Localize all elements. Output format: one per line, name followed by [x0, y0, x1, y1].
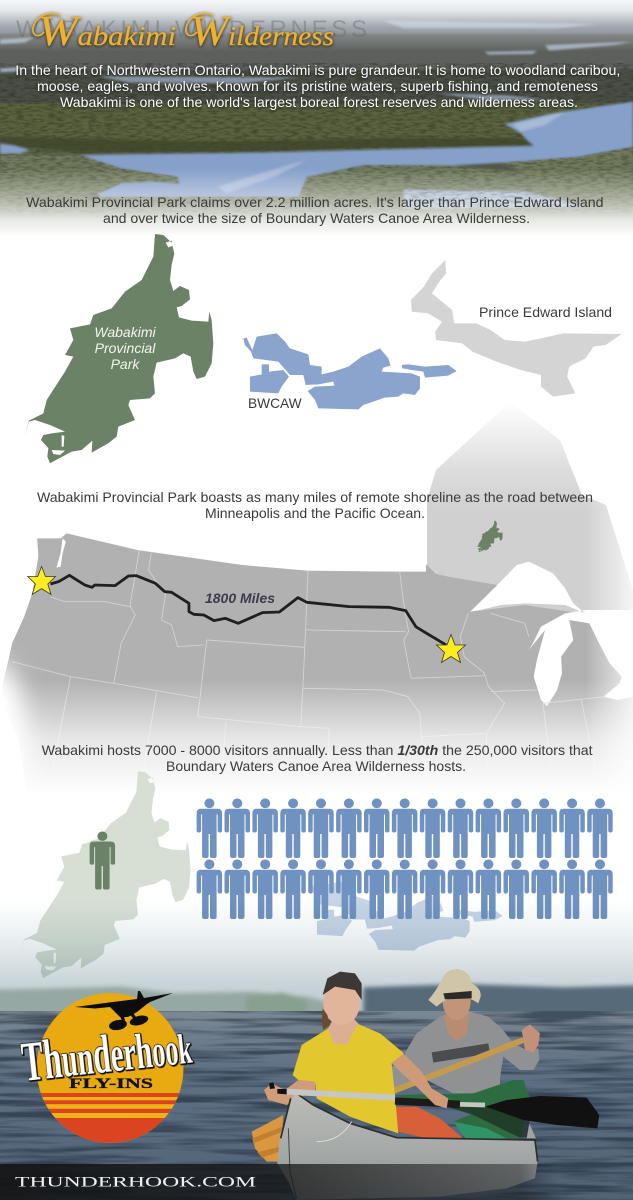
far paddle shaft	[390, 1040, 523, 1092]
logo: Thunderhook Fly-Ins	[19, 991, 195, 1148]
map: Prince Edward Island	[411, 260, 622, 397]
woman in yellow shirt	[264, 972, 404, 1133]
title	[33, 9, 334, 55]
near paddle	[269, 1082, 599, 1128]
faded Wabakimi outline	[20, 771, 191, 978]
label: BWCAW: BWCAW	[248, 395, 302, 411]
near paddle wood blade	[252, 1115, 283, 1162]
man in grey shirt	[387, 969, 540, 1093]
label: Wabakimi Provincial Park	[94, 324, 156, 372]
title: Wabakimi	[38, 9, 176, 55]
panel: canoe photo footer	[0, 900, 633, 1200]
shoreline comparison text	[37, 489, 593, 521]
shoreline comparison text: Wabakimi Provincial Park boasts as many miles of remote shoreline as the road between	[37, 489, 593, 505]
size comparison text: Wabakimi Provincial Park claims over 2.2 million acres. It's larger than Prince Edward Island	[26, 194, 604, 210]
intro paragraph: moose, eagles, and wolves. Known for its pristine waters, superb fishing, and remoteness	[37, 78, 598, 94]
distant treeline	[0, 984, 633, 1020]
label: Wabakimi Provincial Park: Provincial	[95, 340, 156, 356]
water ripples	[0, 1011, 633, 1200]
size comparison text: and over twice the size of Boundary Waters Canoe Area Wilderness.	[103, 210, 530, 226]
ghost heading: WABAKIMI WILDERNESS	[16, 16, 367, 43]
green and orange gear	[393, 1080, 530, 1140]
canoe hull	[277, 1092, 538, 1200]
visitor comparison text	[42, 742, 593, 774]
footer bar	[0, 1164, 633, 1200]
faded BWCAW outline	[311, 882, 503, 951]
icon: star Minneapolis	[436, 634, 466, 662]
panel: visitor comparison	[20, 742, 613, 978]
shoreline comparison text: Minneapolis and the Pacific Ocean.	[205, 505, 425, 521]
great lakes	[57, 538, 633, 706]
woman's forearm	[392, 1053, 448, 1108]
icon: Wabakimi location in Ontario	[476, 521, 503, 552]
map: Boundary Waters	[243, 333, 457, 409]
logo wordmark: Thunderhook	[19, 1014, 195, 1094]
size comparison text	[26, 194, 604, 226]
icon: star Pacific Ocean	[28, 566, 56, 594]
map: northern United States	[2, 533, 633, 800]
panel: aerial lake photo header	[0, 0, 633, 252]
intro paragraph: In the heart of Northwestern Ontario, Wabakimi is pure grandeur. It is home to woodland caribou,	[15, 62, 620, 78]
visitor comparison text: Wabakimi hosts 7000 - 8000 visitors annually. Less than 1/30th the 250,000 visitors that	[42, 742, 593, 758]
label: Wabakimi Provincial Park: Park	[111, 356, 140, 372]
intro paragraph: Wabakimi is one of the world's largest boreal forest reserves and wilderness areas.	[60, 94, 578, 110]
title: Wilderness	[190, 9, 334, 55]
route line	[50, 575, 446, 645]
panel: shoreline route map	[0, 402, 633, 830]
logo subtitle: FLY-INS	[69, 1076, 153, 1092]
state borders	[12, 550, 606, 770]
lake water	[0, 1011, 633, 1200]
icon: floatplane	[75, 991, 173, 1031]
footer website text: THUNDERHOOK.COM	[15, 1174, 256, 1190]
icon: single green visitor	[90, 832, 115, 890]
photo: forest and lakes	[0, 0, 633, 240]
label: Wabakimi Provincial Park: Wabakimi	[94, 324, 156, 340]
panel: size comparison maps	[24, 234, 622, 463]
map: Wabakimi park	[24, 234, 213, 463]
sky haze	[0, 900, 633, 1012]
label: 1800 Miles: 1800 Miles	[205, 591, 276, 606]
label: Prince Edward Island: Prince Edward Island	[479, 304, 612, 320]
visitor comparison text: Boundary Waters Canoe Area Wilderness hosts.	[166, 758, 466, 774]
intro paragraph	[15, 62, 620, 110]
icon grid: blue visitors	[197, 798, 613, 919]
map: Ontario	[427, 402, 633, 700]
canoeists and canoe	[252, 969, 599, 1200]
